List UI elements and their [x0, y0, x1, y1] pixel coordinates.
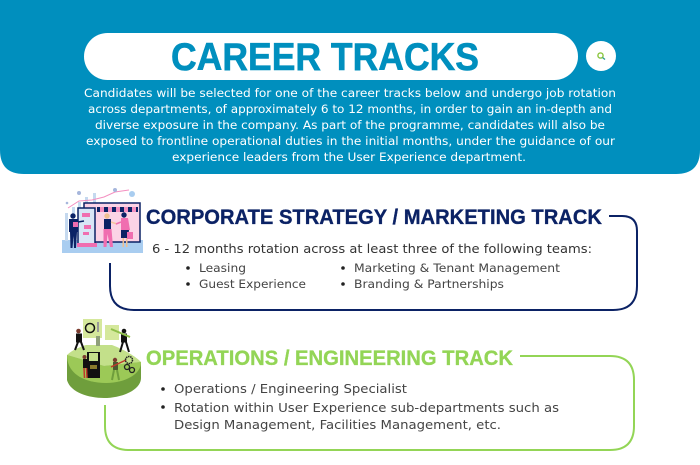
figure: red worker — [82, 355, 88, 378]
team list: Guest Experience — [199, 277, 306, 291]
figure: man centre — [104, 213, 117, 247]
team list — [186, 261, 561, 291]
intro text block: diverse exposure in the company. As part of the programme, candidates will also be — [95, 118, 605, 132]
intro text block: experience leaders from the User Experience department. — [172, 150, 526, 164]
operations list: Operations / Engineering Specialist — [174, 382, 407, 396]
figure: right worker — [111, 329, 130, 352]
rotation description: 6 - 12 months rotation across at least three of the following teams: — [152, 241, 592, 256]
panel: corporate strategy / marketing track — [62, 188, 637, 310]
operations list: Rotation within User Experience sub-departments such as — [174, 401, 559, 415]
figure: woman left — [69, 213, 84, 248]
title: CAREER TRACKS — [171, 36, 479, 79]
figure: left worker — [75, 329, 84, 350]
intro text block — [84, 86, 616, 164]
title pill — [84, 33, 578, 80]
team list: Branding & Partnerships — [354, 277, 504, 291]
heading: corporate strategy track: CORPORATE STRATEGY / MARKETING TRACK — [146, 206, 602, 229]
track outline — [105, 356, 634, 450]
track outline — [110, 216, 637, 310]
operations list — [161, 382, 559, 432]
team list: Leasing — [199, 261, 246, 275]
intro text block: Candidates will be selected for one of the career tracks below and undergo job rotation — [84, 86, 616, 100]
figure: woman right — [116, 212, 133, 247]
icon: search button — [586, 41, 616, 71]
team list: Marketing & Tenant Management — [354, 261, 561, 275]
figure: gear worker — [111, 358, 126, 380]
operations list: Design Management, Facilities Management, etc. — [174, 418, 501, 432]
panel: header banner — [0, 0, 700, 174]
icon: retail storefront illustration — [62, 188, 143, 253]
intro text block: exposed to frontline operational duties in the initial months, under the guidance of our — [86, 134, 615, 148]
heading: operations track: OPERATIONS / ENGINEERING TRACK — [146, 347, 513, 370]
intro text block: across departments, of approximately 6 to 12 months, in order to gain an in-depth and — [88, 102, 612, 116]
panel: operations / engineering track — [67, 319, 634, 450]
icon: green pie platform illustration — [67, 319, 141, 398]
